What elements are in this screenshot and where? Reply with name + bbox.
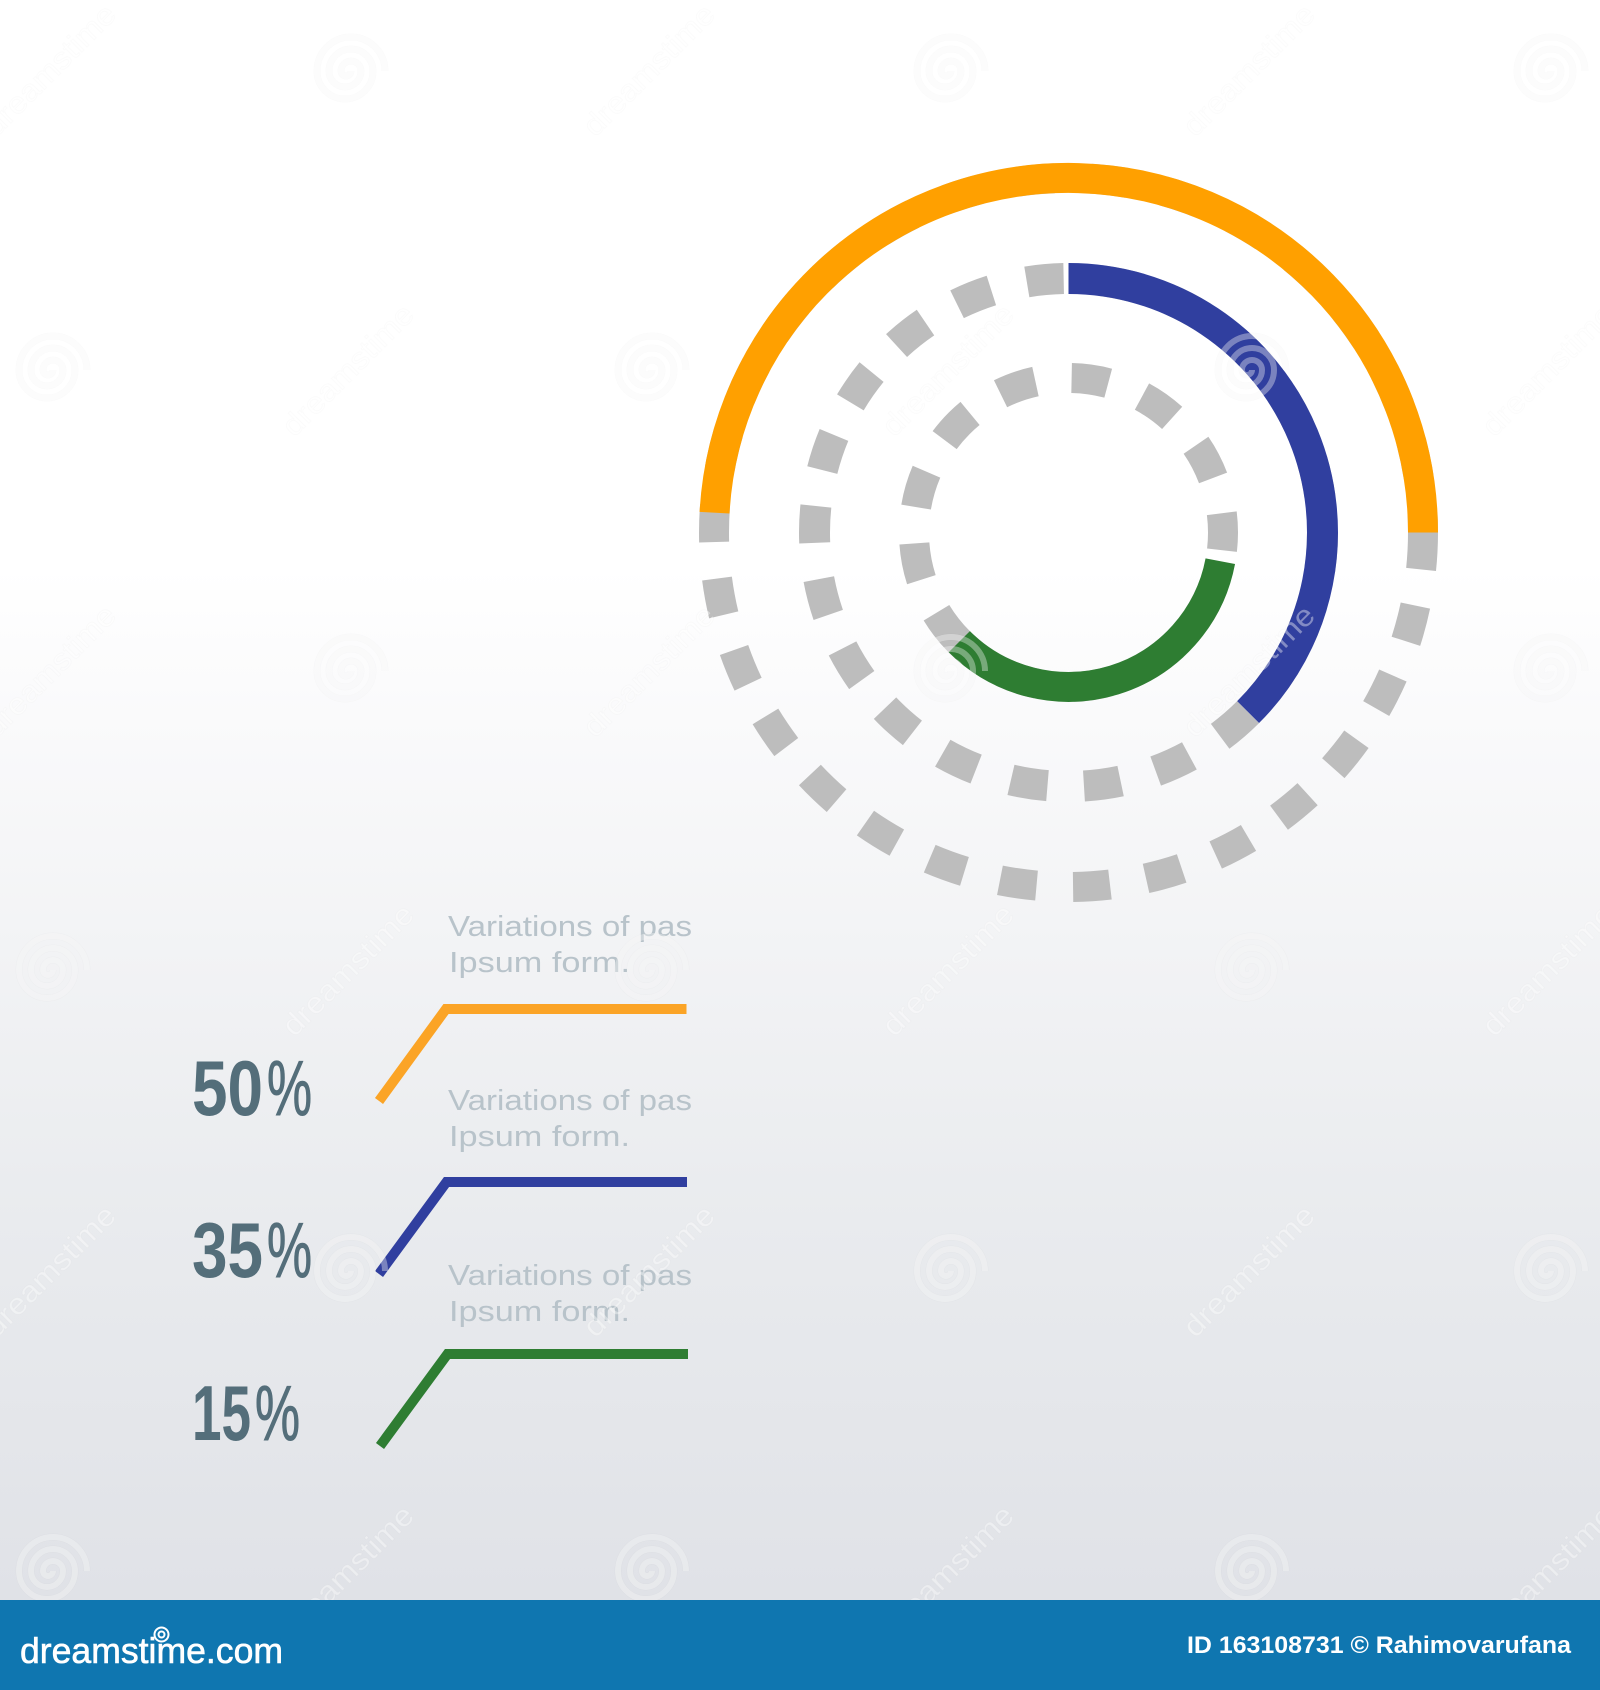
chart: concentric ring chart [709, 173, 1428, 892]
description text: Variations of pas [448, 911, 692, 943]
legend row: 35% blue [192, 1085, 692, 1294]
description text: Variations of pas [448, 1260, 692, 1292]
watermark: repeating diagonal wordmarks: dreamstime [1177, 0, 1322, 143]
leader line: blue [379, 1182, 687, 1274]
watermark: repeating diagonal wordmarks: dreamstime [876, 898, 1021, 1043]
footer logo spiral icon [154, 1628, 168, 1642]
legend row: 15% green [192, 1260, 692, 1457]
footer credit text: ID 163108731 © Rahimovarufana [1187, 1632, 1572, 1659]
value: 15%: 15% [192, 1369, 300, 1457]
watermark: repeating diagonal wordmarks: dreamstime [1177, 599, 1322, 744]
footer logo text: dreamstime.com [20, 1630, 283, 1671]
watermark: repeating diagonal wordmarks: dreamstime [1177, 1199, 1322, 1344]
leader line: orange [379, 1009, 686, 1101]
watermark: repeating diagonal wordmarks: dreamstime [276, 298, 421, 443]
leader line: green [380, 1354, 688, 1446]
middle ring: grey dashed track [709, 173, 1428, 892]
description text: Variations of pas [448, 1085, 692, 1117]
value: 50%: 50% [192, 1044, 312, 1132]
inner ring: green 15% arc [959, 561, 1220, 687]
description text: Ipsum form. [449, 1121, 630, 1153]
description text: Ipsum form. [449, 947, 630, 979]
description text: Ipsum form. [449, 1296, 630, 1328]
footer bar [0, 1600, 1600, 1690]
inner ring: grey dashed track [850, 314, 1287, 751]
watermark: repeating diagonal wordmarks: dreamstime [276, 1499, 421, 1644]
watermark: repeating diagonal wordmarks: dreamstime [577, 1199, 722, 1344]
middle ring: blue 35% arc [1068, 278, 1322, 712]
watermark: repeating diagonal wordmarks: dreamstime [577, 0, 722, 143]
watermark: repeating diagonal wordmarks: dreamstime [577, 599, 722, 744]
value: 35%: 35% [192, 1206, 312, 1294]
watermark: repeating diagonal wordmarks: dreamstime [276, 898, 421, 1043]
watermark: repeating diagonal wordmarks: dreamstime [876, 1499, 1021, 1644]
legend row: 50% orange [192, 911, 692, 1132]
outer ring: orange 50% arc [715, 178, 1423, 532]
outer ring: grey dashed track [714, 178, 1423, 887]
watermark: repeating diagonal wordmarks: dreamstime [876, 298, 1021, 443]
